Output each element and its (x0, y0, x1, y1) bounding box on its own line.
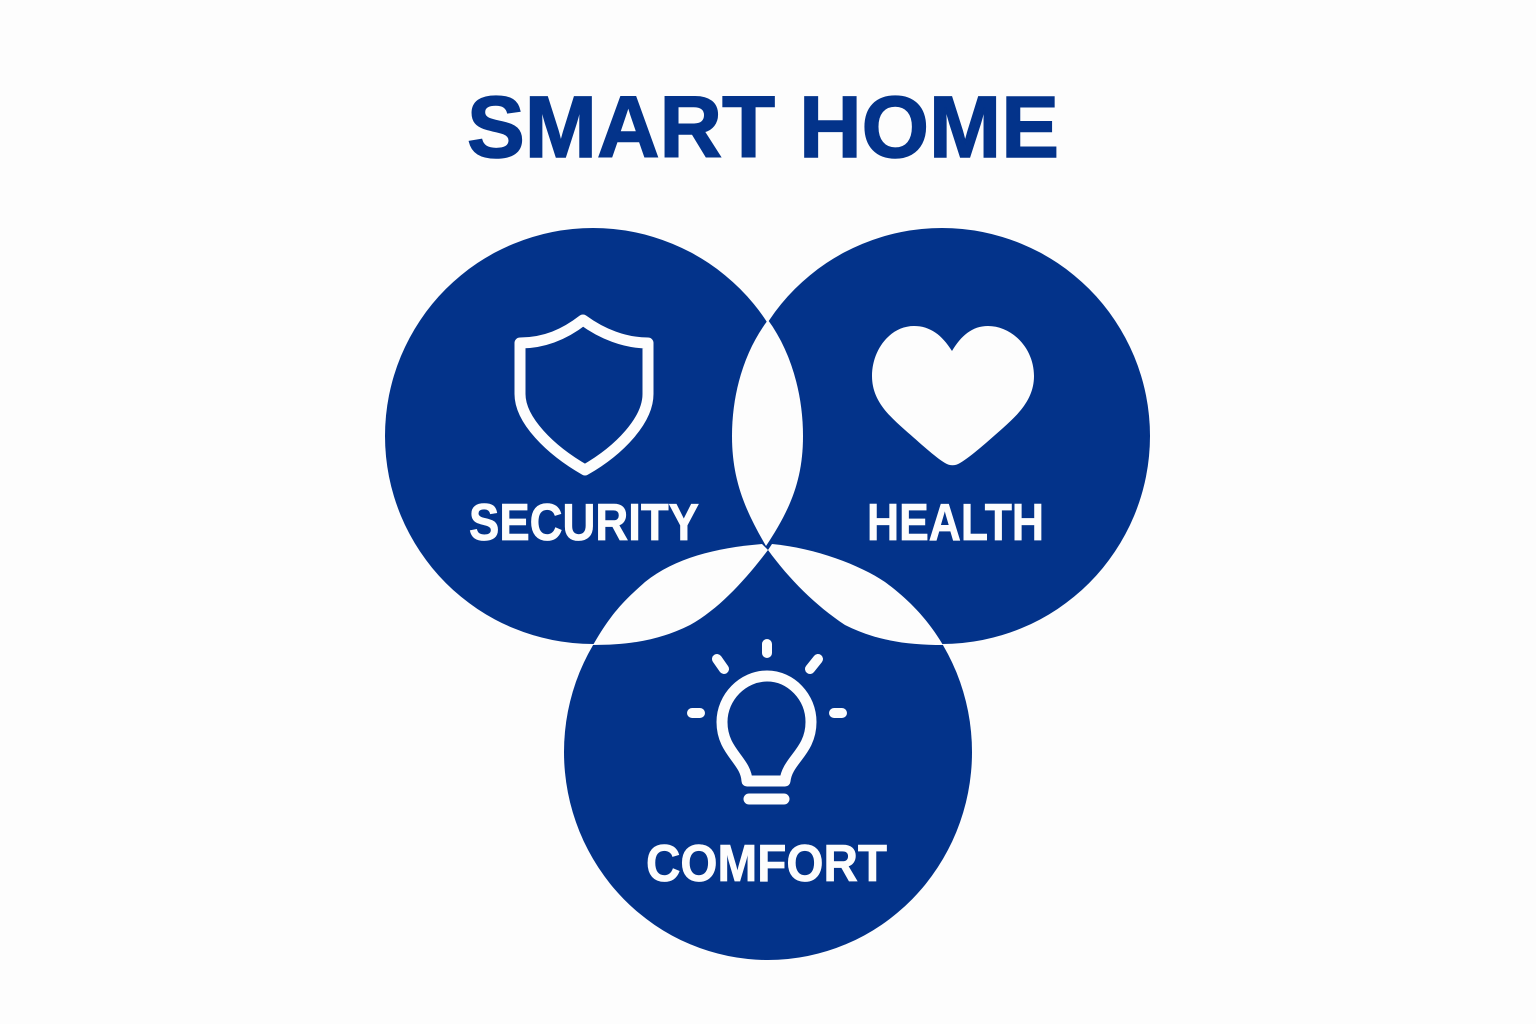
label: comfort: COMFORT (646, 835, 887, 893)
overlap: health and comfort (768, 544, 943, 645)
icon: light bulb (692, 644, 842, 799)
icon: shield (520, 320, 648, 470)
label: security: SECURITY (469, 494, 699, 552)
circle: health (734, 228, 1150, 644)
bulb base (749, 794, 784, 804)
overlap: security and health (732, 320, 803, 546)
overlap: security and comfort (593, 544, 768, 645)
circle: comfort (564, 544, 972, 960)
rays (692, 644, 842, 713)
bulb outline (722, 676, 811, 781)
icon: heart (872, 326, 1034, 465)
title: SMART HOME (467, 79, 1059, 176)
circle: security (385, 228, 801, 644)
venn diagram (385, 228, 1150, 960)
label: health: HEALTH (867, 494, 1044, 552)
